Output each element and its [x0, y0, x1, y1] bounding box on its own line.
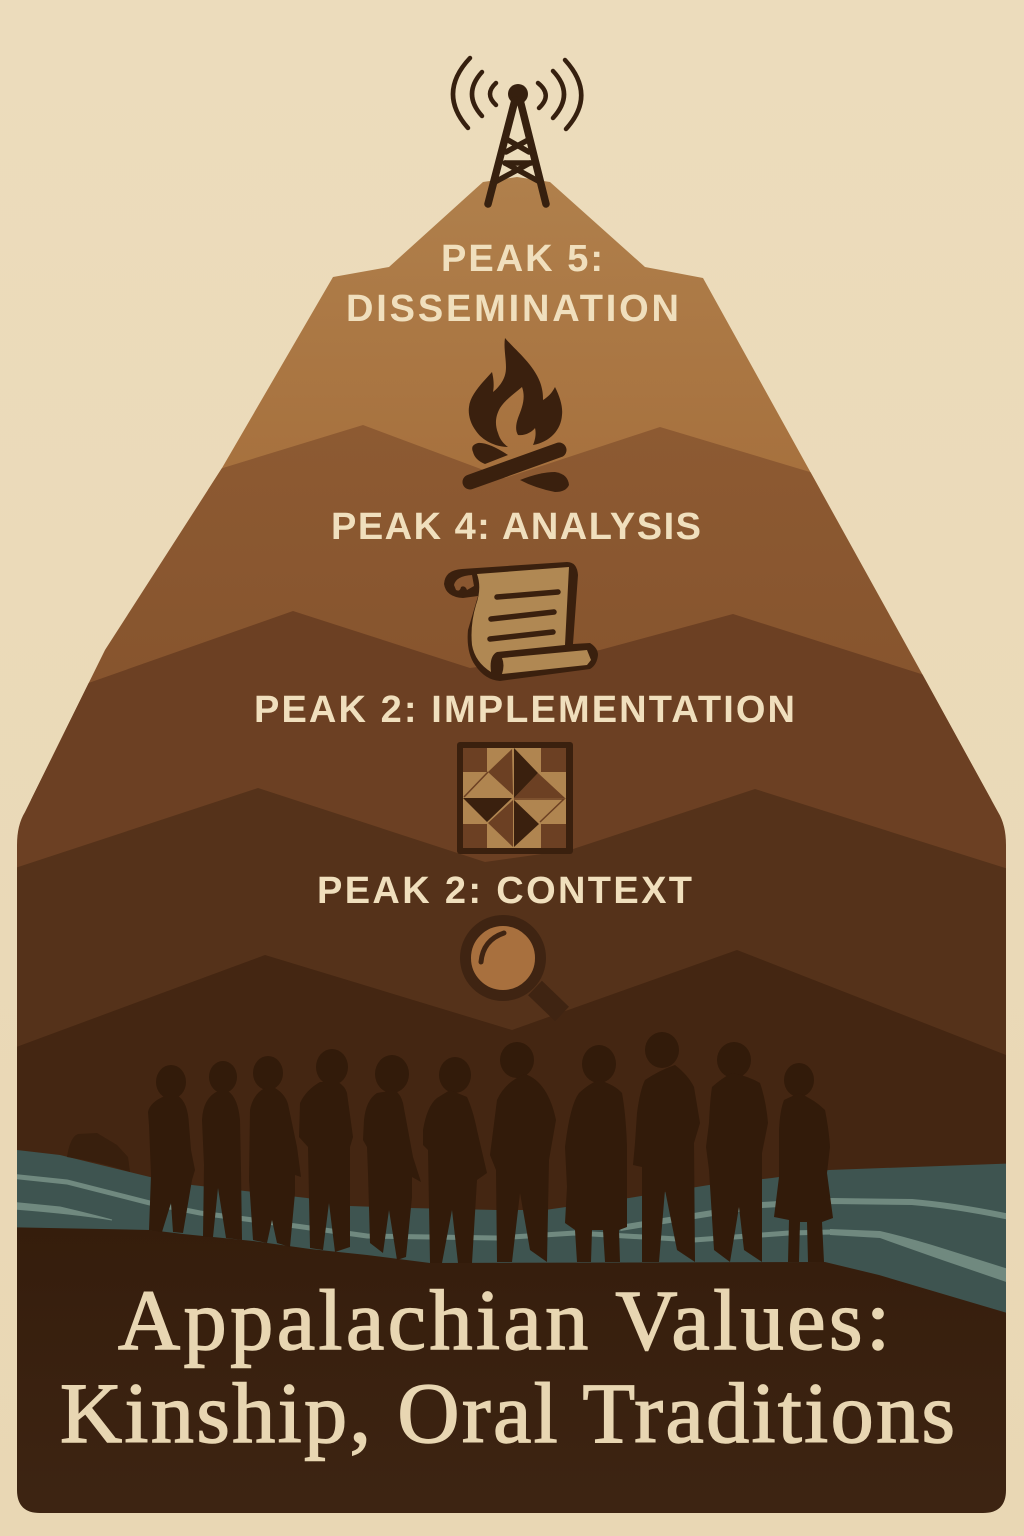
person 2: [202, 1061, 242, 1240]
person 7: [490, 1042, 556, 1262]
tower frame: [488, 100, 546, 204]
lens highlight: [481, 933, 504, 962]
scroll text lines: [490, 592, 558, 639]
lens: [466, 920, 540, 996]
person 3: [249, 1056, 301, 1247]
person 5: [363, 1055, 421, 1260]
highlight: left taper: [17, 1202, 112, 1220]
icon: scroll: [444, 562, 598, 681]
tower ball: [508, 84, 528, 104]
tower bracing: [495, 140, 540, 182]
river highlights: [0, 1175, 1024, 1288]
quilt base: [463, 748, 566, 848]
peak 5 label: DISSEMINATION: [346, 288, 679, 330]
person 9: [633, 1032, 700, 1262]
peak 4 label: PEAK 4: ANALYSIS: [331, 506, 701, 548]
person 11: [774, 1063, 833, 1262]
signal waves right: [538, 60, 581, 129]
person 8: [565, 1045, 627, 1262]
person 4: [299, 1049, 353, 1252]
peak 5 label: [346, 238, 679, 330]
log: lower right: [520, 472, 569, 492]
river: [17, 1150, 1006, 1313]
signal waves left: [453, 58, 496, 128]
layer: peak 5: [208, 177, 820, 490]
handle: [535, 988, 562, 1014]
rock silhouette: [67, 1133, 130, 1172]
quilt mid triangles: [488, 749, 565, 847]
icon: campfire: [469, 338, 569, 492]
title: Appalachian Values:: [118, 1272, 890, 1368]
people silhouettes: [148, 1032, 833, 1263]
layer: peak 4: [0, 425, 1024, 800]
highlight: second stream: [620, 1201, 1024, 1228]
scroll curl inside: [454, 575, 474, 591]
scroll roll: [502, 650, 591, 674]
person 6: [423, 1057, 487, 1263]
layer: peak 2: [17, 788, 1006, 1055]
ground: [17, 1227, 1006, 1513]
icon: radio tower: [453, 58, 581, 204]
peak 5 label: PEAK 5:: [441, 238, 603, 280]
quilt light outlines: [464, 772, 564, 822]
quilt frame: [457, 742, 573, 854]
peak 3 label: PEAK 2: IMPLEMENTATION: [254, 689, 795, 731]
quilt corners: [463, 748, 566, 848]
icon: magnifying glass: [466, 920, 562, 1014]
scroll outline: [444, 562, 598, 681]
person 10: [706, 1042, 768, 1262]
highlight: upper stream right end: [830, 1229, 1006, 1282]
title: Kinship, Oral Traditions: [60, 1365, 955, 1461]
title: [60, 1272, 955, 1461]
highlight: upper stream: [0, 1175, 832, 1240]
person 1: [148, 1065, 195, 1233]
peak 2 label: PEAK 2: CONTEXT: [317, 870, 692, 912]
scroll paper: [472, 567, 569, 672]
log: main: [470, 450, 559, 482]
layer: peak 3: [17, 611, 1006, 868]
quilt dark triangles: [463, 748, 539, 847]
flame: [469, 338, 562, 447]
icon: quilt block: [457, 742, 573, 854]
log: upper left: [472, 443, 508, 464]
layer: peak 1: [17, 950, 1006, 1210]
